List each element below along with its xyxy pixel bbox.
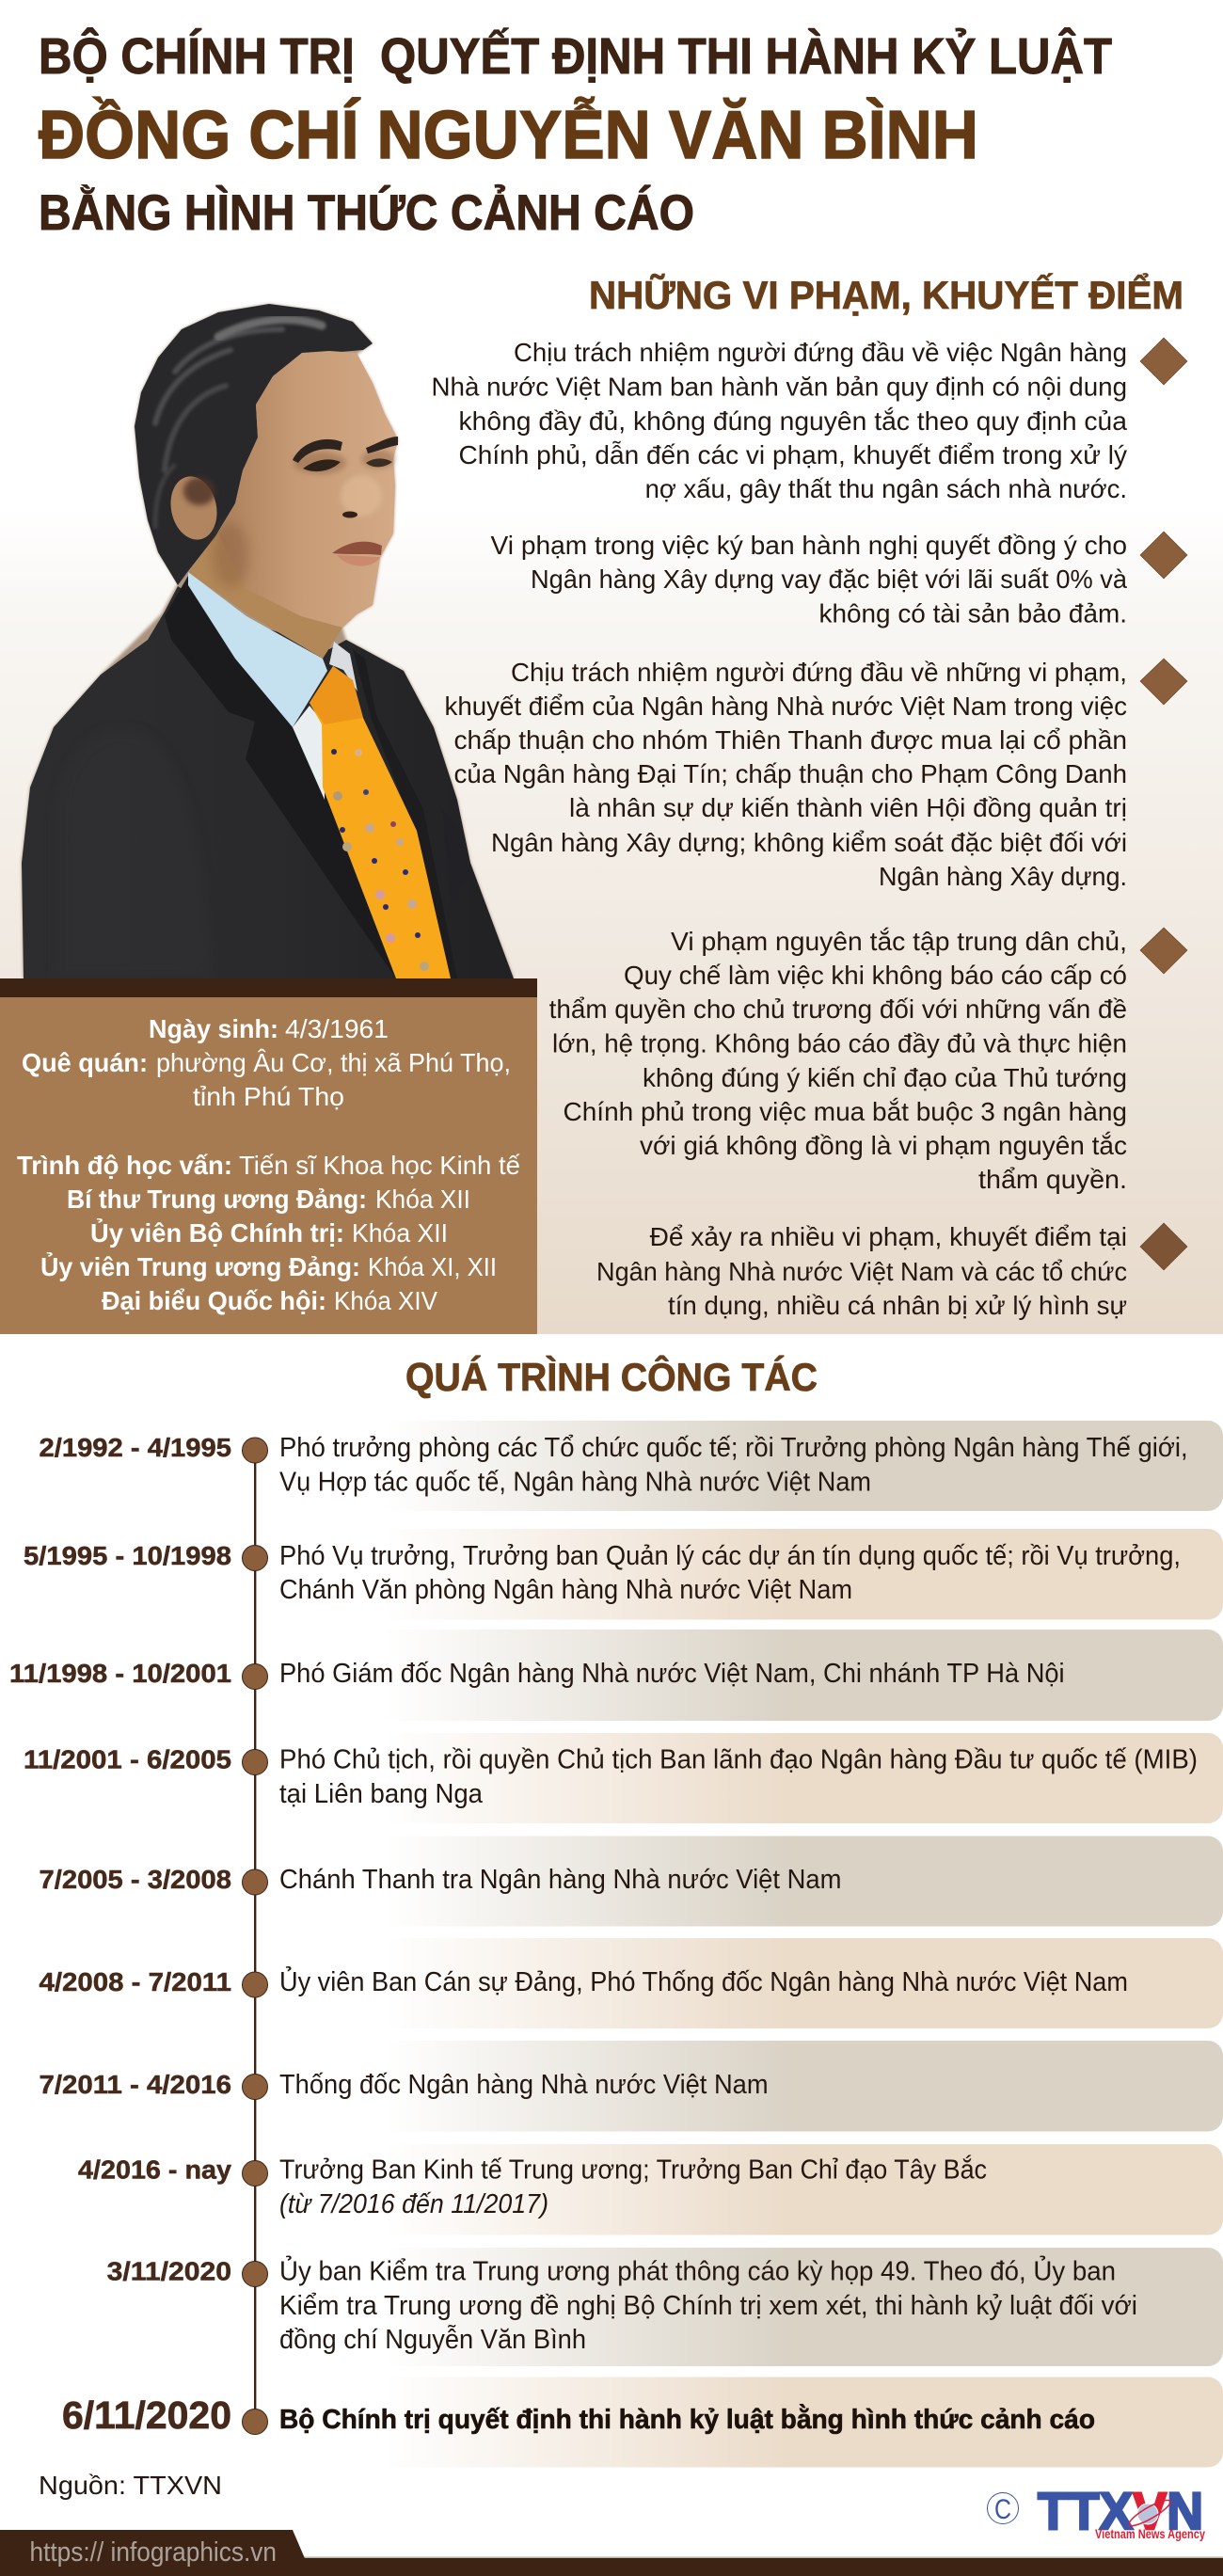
row 4 text	[279, 1744, 1198, 1809]
lapel	[165, 576, 418, 978]
education: Tiến sĩ Khoa học Kinh tế	[239, 1151, 520, 1180]
row 2 text	[279, 1541, 1181, 1605]
timeline row 8	[78, 2144, 1223, 2235]
row 10 dot	[243, 2409, 267, 2435]
portrait of Nguyễn Văn Bình	[22, 304, 514, 978]
copyright symbol	[988, 2493, 1018, 2525]
row 1 date: 2/1992 - 4/1995	[40, 1433, 231, 1462]
row 7 date: 7/2011 - 4/2016	[40, 2070, 231, 2099]
violation 1 text: Chịu trách nhiệm người đứng đầu về việc Ngân hàng	[514, 338, 1127, 367]
party secretary: Khóa XII	[375, 1185, 470, 1214]
violation 5 text: tín dụng, nhiều cá nhân bị xử lý hình sự	[668, 1291, 1127, 1320]
hometown: phường Âu Cơ, thị xã Phú Thọ,	[156, 1048, 511, 1077]
violation 4 text: với giá không đồng là vi phạm nguyên tắc	[640, 1131, 1127, 1160]
timeline row 2	[24, 1529, 1223, 1620]
row 9 date: 3/11/2020	[107, 2256, 231, 2286]
row 3 date: 11/1998 - 10/2001	[9, 1659, 231, 1688]
violation 1 text: Chính phủ, dẫn đến các vi phạm, khuyết điểm trong xử lý	[459, 440, 1127, 469]
row 8 dot	[243, 2160, 267, 2186]
national assembly: Khóa XIV	[334, 1286, 437, 1315]
central committee: Khóa XI, XII	[368, 1252, 497, 1281]
source: Nguồn: TTXVN	[39, 2471, 222, 2500]
hometown: tỉnh Phú Thọ	[193, 1082, 344, 1111]
footer grey line	[0, 2557, 1223, 2559]
violation 4 text: Vi phạm nguyên tắc tập trung dân chủ,	[671, 927, 1127, 956]
politburo: Ủy viên Bộ Chính trị:	[90, 1217, 344, 1248]
diamond icon	[1140, 928, 1187, 974]
violation 4 text: thẩm quyền cho chủ trương đối với những vấn đề	[549, 994, 1127, 1024]
row 6 date: 4/2008 - 7/2011	[40, 1967, 231, 1996]
violation 2 text: Vi phạm trong việc ký ban hành nghị quyết đồng ý cho	[491, 531, 1127, 560]
eyes	[303, 458, 392, 471]
row 9 text: Kiểm tra Trung ương đề nghị Bộ Chính trị xem xét, thi hành kỷ luật đối với	[279, 2291, 1137, 2321]
violation 4 text: Quy chế làm việc khi không báo cáo cấp có	[624, 961, 1127, 990]
info panel: biography	[0, 978, 537, 1334]
birth date	[149, 1014, 389, 1043]
national assembly: Đại biểu Quốc hội:	[102, 1286, 326, 1315]
tie dots	[331, 749, 429, 971]
violation 5	[596, 1222, 1187, 1320]
suit jacket	[22, 586, 514, 978]
row 1 text: Vụ Hợp tác quốc tế, Ngân hàng Nhà nước Việt Nam	[279, 1468, 871, 1498]
necktie	[310, 666, 451, 978]
copyright symbol: C	[994, 2494, 1011, 2525]
white shirt	[293, 706, 325, 800]
row 10 text: Bộ Chính trị quyết định thi hành kỷ luật bằng hình thức cảnh cáo	[279, 2403, 1095, 2435]
violation 3 text: Ngân hàng Xây dựng.	[879, 862, 1127, 891]
right lapel	[353, 649, 457, 978]
tie knot shade	[310, 666, 363, 724]
footer strip	[0, 2558, 1223, 2576]
timeline row 10	[62, 2377, 1223, 2467]
row 5 date: 7/2005 - 3/2008	[40, 1865, 231, 1894]
right collar	[329, 642, 357, 692]
row 10 bar	[357, 2377, 1223, 2467]
violation 4 text: lớn, hệ trọng. Không báo cáo đầy đủ và thực hiện	[552, 1029, 1127, 1057]
row 5 dot	[243, 1869, 267, 1895]
row 4 bar	[357, 1733, 1223, 1823]
violation 2 text	[491, 531, 1127, 628]
violation 4	[549, 927, 1187, 1194]
row 4 dot	[243, 1750, 267, 1774]
violation 4 text	[549, 927, 1127, 1194]
face	[218, 351, 398, 628]
row 10 date: 6/11/2020	[62, 2393, 231, 2437]
birth date: Ngày sinh:	[149, 1014, 278, 1043]
row 6 text: Ủy viên Ban Cán sự Đảng, Phó Thống đốc Ngân hàng Nhà nước Việt Nam	[279, 1965, 1128, 1997]
violation 3 text: của Ngân hàng Đại Tín; chấp thuận cho Phạm Công Danh	[453, 759, 1127, 788]
row 9 dot	[243, 2262, 267, 2286]
violation 2 text: Ngân hàng Xây dựng vay đặc biệt với lãi suất 0% và	[531, 564, 1127, 594]
row 9 text	[279, 2254, 1137, 2355]
row 4 text: tại Liên bang Nga	[279, 1779, 484, 1809]
row 4 text: Phó Chủ tịch, rồi quyền Chủ tịch Ban lãnh đạo Ngân hàng Đầu tư quốc tế (MIB)	[279, 1744, 1198, 1774]
row 3 bar	[357, 1630, 1223, 1721]
row 7 bar	[357, 2041, 1223, 2132]
footer tab	[0, 2530, 312, 2576]
row 5 bar	[357, 1837, 1223, 1927]
row 2 dot	[243, 1545, 267, 1571]
heading: violations: NHỮNG VI PHẠM, KHUYẾT ĐIỂM	[589, 272, 1183, 317]
timeline row 6	[40, 1938, 1223, 2028]
row 4 date: 11/2001 - 6/2005	[24, 1744, 231, 1774]
portrait shadow	[22, 304, 514, 978]
row 1 text	[279, 1433, 1188, 1498]
row 8 date: 4/2016 - nay	[78, 2155, 231, 2185]
violation 3 text: Chịu trách nhiệm người đứng đầu về những vi phạm,	[511, 658, 1127, 687]
info panel dark header bar	[0, 978, 537, 997]
mouth	[332, 542, 382, 566]
central committee: Ủy viên Trung ương Đảng:	[40, 1251, 360, 1281]
birth date: 4/3/1961	[285, 1014, 389, 1043]
row 6 bar	[357, 1938, 1223, 2028]
timeline row 1	[40, 1421, 1223, 1511]
diamond icon	[1140, 532, 1187, 579]
violation 1 text: nợ xấu, gây thất thu ngân sách nhà nước.	[645, 474, 1127, 503]
politburo: Khóa XII	[352, 1218, 448, 1248]
info panel body	[0, 997, 537, 1334]
eyebrows	[293, 437, 398, 463]
title block	[39, 27, 1112, 241]
background gradient panel	[0, 508, 1223, 1334]
education	[17, 1151, 520, 1180]
timeline row 7	[40, 2041, 1223, 2132]
diamond icon	[1140, 338, 1187, 385]
violation 3 text: Ngân hàng Xây dựng; không kiểm soát đặc biệt đối với	[491, 828, 1127, 857]
violation 5 text: Ngân hàng Nhà nước Việt Nam và các tổ chức	[596, 1257, 1127, 1286]
timeline row 5	[40, 1837, 1223, 1927]
title line 1: BỘ CHÍNH TRỊ QUYẾT ĐỊNH THI HÀNH KỶ LUẬT	[39, 27, 1112, 85]
title line 3: BẰNG HÌNH THỨC CẢNH CÁO	[39, 184, 694, 241]
violation 1 text: Nhà nước Việt Nam ban hành văn bản quy định có nội dung	[431, 373, 1127, 401]
sleeve highlight	[56, 730, 212, 978]
violation 4 text: thẩm quyền.	[978, 1165, 1127, 1194]
row 5 text: Chánh Thanh tra Ngân hàng Nhà nước Việt Nam	[279, 1865, 841, 1895]
row 1 text: Phó trưởng phòng các Tổ chức quốc tế; rồi Trưởng phòng Ngân hàng Thế giới,	[279, 1433, 1188, 1463]
violation 5 text: Để xảy ra nhiều vi phạm, khuyết điểm tại	[650, 1222, 1127, 1251]
row 2 date: 5/1995 - 10/1998	[24, 1541, 231, 1570]
violation 2	[491, 531, 1187, 628]
row 1 bar	[357, 1421, 1223, 1511]
party secretary: Bí thư Trung ương Đảng:	[67, 1185, 367, 1214]
ear	[165, 472, 223, 544]
row 8 text: (từ 7/2016 đến 11/2017)	[279, 2189, 548, 2219]
row 8 text: Trưởng Ban Kinh tế Trung ương; Trưởng Ban Chỉ đạo Tây Bắc	[279, 2155, 987, 2186]
national assembly	[102, 1286, 437, 1315]
hometown: Quê quán:	[22, 1048, 148, 1077]
timeline row 9	[107, 2248, 1223, 2366]
row 8 bar	[357, 2144, 1223, 2235]
hair strands	[155, 320, 322, 527]
row 9 text: đồng chí Nguyễn Văn Bình	[279, 2324, 586, 2355]
violation 1	[431, 338, 1187, 503]
shirt collar	[188, 572, 327, 727]
violation 3	[444, 658, 1187, 891]
violation 3 text: là nhân sự dự kiến thành viên Hội đồng quản trị	[569, 793, 1127, 822]
row 3 text: Phó Giám đốc Ngân hàng Nhà nước Việt Nam, Chi nhánh TP Hà Nội	[279, 1659, 1065, 1689]
hair	[135, 304, 373, 585]
wordmark: TTXVN	[1038, 2481, 1203, 2540]
row 8 text	[279, 2155, 987, 2219]
violation 1 text: không đầy đủ, không đúng nguyên tắc theo quy định của	[459, 406, 1127, 436]
row 2 text: Chánh Văn phòng Ngân hàng Nhà nước Việt Nam	[279, 1575, 852, 1605]
cheek shadow	[212, 522, 249, 588]
education: Trình độ học vấn:	[17, 1151, 232, 1180]
violation 1 text	[431, 338, 1127, 503]
violation 4 text: Chính phủ trong việc mua bắt buộc 3 ngân hàng	[563, 1097, 1127, 1126]
logo: TTXVN	[988, 2481, 1205, 2541]
row 6 dot	[243, 1972, 267, 1997]
nose	[341, 475, 382, 517]
globe	[1126, 2496, 1173, 2530]
row 7 dot	[243, 2074, 267, 2100]
title line 2: ĐỒNG CHÍ NGUYỄN VĂN BÌNH	[39, 97, 978, 173]
violation 5 text	[596, 1222, 1127, 1320]
hometown	[22, 1048, 511, 1111]
violation 3 text: chấp thuận cho nhóm Thiên Thanh được mua lại cổ phần	[453, 725, 1127, 755]
row 7 text: Thống đốc Ngân hàng Nhà nước Việt Nam	[279, 2070, 769, 2100]
timeline vertical line	[254, 1450, 256, 2422]
row 9 text: Ủy ban Kiểm tra Trung ương phát thông cáo kỳ họp 49. Theo đó, Ủy ban	[279, 2254, 1116, 2286]
row 1 dot	[243, 1438, 267, 1463]
timeline row 4	[24, 1733, 1223, 1823]
row 2 text: Phó Vụ trưởng, Trưởng ban Quản lý các dự án tín dụng quốc tế; rồi Vụ trưởng,	[279, 1541, 1181, 1571]
footer bar	[0, 2530, 1223, 2576]
diamond icon	[1140, 659, 1187, 705]
eye socket shade	[294, 450, 395, 474]
violation 3 text	[444, 658, 1127, 891]
row 3 dot	[243, 1663, 267, 1690]
neck	[188, 532, 373, 659]
row 9 bar	[357, 2248, 1223, 2366]
sleeve arm edge right	[442, 809, 470, 903]
violation 4 text: không đúng ý kiến chỉ đạo của Thủ tướng	[643, 1063, 1127, 1092]
timeline row 3	[9, 1630, 1223, 1721]
diamond icon	[1140, 1223, 1187, 1270]
violation 3 text: khuyết điểm của Ngân hàng Nhà nước Việt Nam trong việc	[444, 692, 1127, 721]
heading: work history: QUÁ TRÌNH CÔNG TÁC	[405, 1354, 818, 1399]
website url: https:// infographics.vn	[30, 2537, 277, 2568]
row 2 bar	[357, 1529, 1223, 1620]
violation 2 text: không có tài sản bảo đảm.	[818, 598, 1127, 628]
